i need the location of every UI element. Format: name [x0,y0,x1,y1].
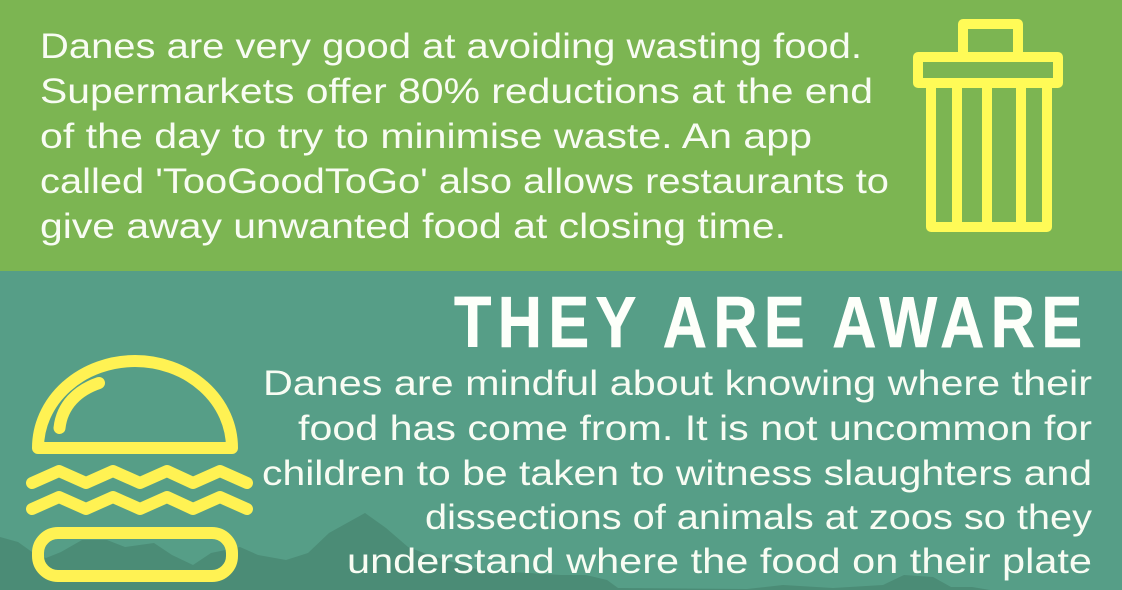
text block: knowing where food comes from: dissections of animals at zoos so they [425,498,1093,537]
panel: they are aware [0,271,1122,590]
mountain range backdrop [0,513,990,590]
text block: knowing where food comes from: Danes are mindful about knowing where their [263,364,1092,403]
text block: avoiding food waste: give away unwanted food at closing time. [40,207,786,246]
text block: knowing where food comes from: understand where the food on their plate [347,542,1092,581]
text block: avoiding food waste: of the day to try to minimise waste. An app [40,117,812,156]
icon: trash can [918,24,1058,227]
icon: burger [32,361,247,576]
text block: avoiding food waste [40,27,889,246]
text block: knowing where food comes from: children to be taken to witness slaughters and [262,454,1092,493]
text block: knowing where food comes from: food has come from. It is not uncommon for [298,409,1092,448]
heading: they are aware: THEY ARE AWARE [454,283,1082,363]
text block: avoiding food waste: called 'TooGoodToGo' also allows restaurants to [40,162,889,201]
text block: knowing where food comes from [262,364,1093,581]
text block: avoiding food waste: Supermarkets offer 80% reductions at the end [40,72,873,111]
text block: avoiding food waste: Danes are very good at avoiding wasting food. [40,27,862,66]
panel: food waste [0,0,1122,271]
